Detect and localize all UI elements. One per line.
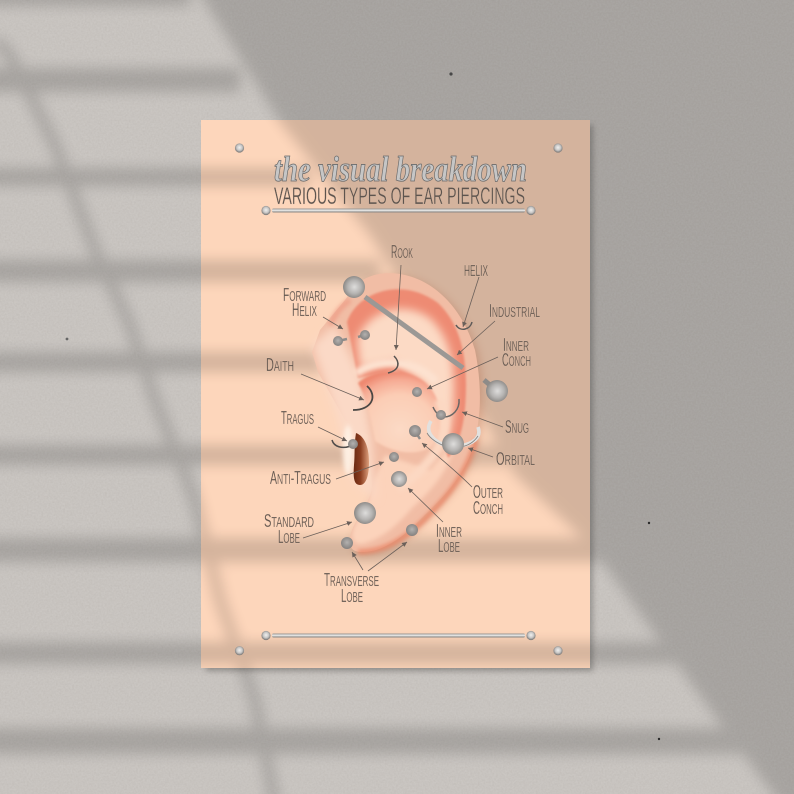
label: orbital: ORBITAL: [496, 449, 535, 469]
label: inner conch: INNER: [503, 335, 529, 355]
transverse lobe studs: [341, 524, 418, 549]
corner screws: [235, 143, 563, 655]
inner conch stud: [412, 387, 422, 397]
label: inner lobe: INNER: [436, 521, 462, 541]
bottom silver rod: [261, 631, 536, 640]
industrial barbell: [343, 276, 508, 402]
top silver rod: [261, 206, 536, 215]
label: transverse lobe: TRANSVERSE: [324, 570, 379, 590]
label: outer conch: CONCH: [473, 498, 503, 518]
label: daith: DAITH: [266, 355, 294, 375]
piercing labels: [264, 242, 540, 606]
antihelix light ridge: [356, 363, 436, 382]
rook ring: [388, 356, 398, 373]
ear canal: [354, 433, 369, 485]
label: tragus: TRAGUS: [281, 408, 314, 428]
tragus glow: [343, 425, 353, 475]
label: standard lobe: LOBE: [278, 527, 300, 547]
antihelix fold: [398, 400, 444, 488]
anti-tragus stud: [389, 452, 399, 462]
leader arrows: [301, 265, 503, 571]
label: anti-tragus: ANTI-TRAGUS: [270, 468, 331, 488]
standard lobe stud: [354, 502, 376, 524]
daith ring: [353, 386, 372, 410]
label: forward helix: [283, 285, 326, 320]
label: rook: ROOK: [391, 242, 413, 262]
orbital ring: [427, 421, 479, 455]
snug piercing: [433, 399, 459, 420]
subtitle: VARIOUS TYPES OF EAR PIERCINGS: [274, 183, 525, 210]
forward crease: [330, 300, 350, 325]
label: inner lobe: LOBE: [438, 536, 460, 556]
ear illustration: [312, 273, 483, 555]
lobe surface: [352, 440, 456, 544]
inner lobe stud: [391, 471, 407, 487]
label: forward helix: HELIX: [292, 300, 317, 320]
label: transverse lobe: LOBE: [341, 586, 363, 606]
label: helix: HELIX: [464, 263, 488, 280]
poster panel: [201, 120, 590, 668]
lower rim edge: [358, 440, 476, 552]
label: snug: SNUG: [505, 417, 529, 437]
label: inner conch: CONCH: [502, 350, 531, 370]
tragus ring: [332, 439, 358, 449]
helix ring: [456, 322, 472, 329]
label: inner lobe: [436, 521, 462, 556]
label: standard lobe: STANDARD: [264, 511, 314, 531]
fossa light area: [357, 309, 454, 452]
inner helix fold: [347, 289, 466, 458]
ear silhouette: [312, 273, 480, 552]
forward helix studs: [333, 330, 370, 346]
label: outer conch: [473, 482, 503, 518]
label: industrial: INDUSTRIAL: [489, 301, 540, 321]
label: outer conch: OUTER: [473, 482, 503, 502]
panel drop shadow: [206, 125, 593, 671]
label: transverse lobe: [324, 570, 379, 606]
pale tragus side blend: [312, 325, 376, 500]
piercing jewellery: [332, 276, 508, 549]
label: inner conch: [502, 335, 531, 370]
outer conch stud: [409, 425, 421, 439]
title: the visual breakdown: [274, 149, 527, 189]
conch bowl: [358, 371, 442, 452]
ear cast shadow: [353, 276, 483, 555]
label: forward helix: FORWARD: [283, 285, 326, 305]
label: standard lobe: [264, 511, 314, 547]
